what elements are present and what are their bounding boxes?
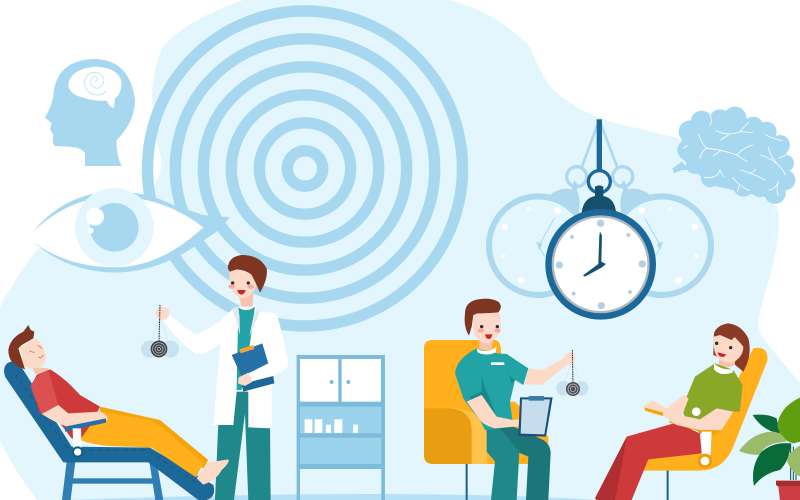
icon: brain (672, 107, 795, 204)
yellow armchair (424, 340, 548, 500)
therapist in armchair (424, 299, 588, 500)
cabinet (297, 355, 385, 500)
potted plant (739, 397, 800, 500)
woman head (713, 323, 750, 372)
icon: main pocket watch (545, 119, 656, 320)
woman patient in chair (595, 323, 768, 500)
woman's chair (640, 348, 768, 500)
icon: head silhouette with spiral (45, 59, 135, 166)
doctor with pendulum and clipboard (141, 255, 288, 500)
therapist body (455, 348, 575, 500)
handheld pendulum (141, 305, 179, 358)
doctor head (228, 255, 267, 320)
reclining chair (4, 362, 214, 500)
patient in reclining chair (4, 325, 229, 500)
patient body (31, 369, 229, 485)
floor shadow (70, 494, 600, 500)
woman body (595, 363, 743, 500)
therapist pendulum (556, 350, 588, 396)
doctor body (156, 306, 288, 500)
icon: swinging ghost watches (489, 120, 711, 295)
concentric hypnosis rings (148, 11, 462, 326)
icon: eye (27, 188, 230, 273)
therapist head (465, 299, 501, 354)
patient head (8, 325, 50, 377)
